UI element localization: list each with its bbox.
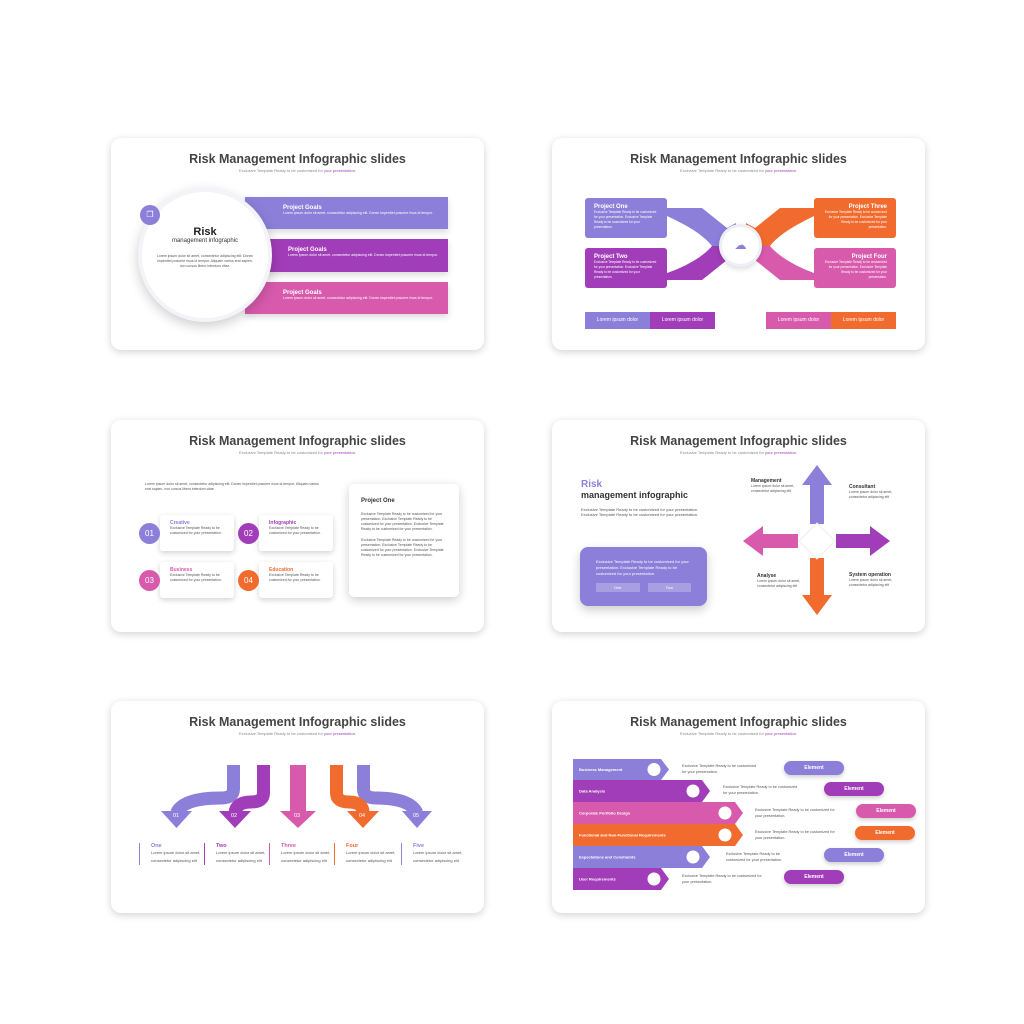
main circle: Risk	[193, 226, 217, 238]
main circle: management infographic	[172, 238, 238, 244]
subtitle: Exclusive Template Ready to be customized for your presentation.	[239, 168, 356, 173]
arrow rows	[573, 759, 835, 890]
card Education: 04	[244, 576, 253, 585]
arrow rows: for your presentation.	[682, 770, 718, 774]
bottom bars right: Lorem ipsum dolor	[843, 317, 884, 323]
label Management	[751, 478, 794, 493]
label Consultant: consectetur adipiscing elit	[849, 495, 889, 499]
card Creative	[139, 514, 236, 556]
slide 3: four numbered cards	[111, 420, 484, 632]
step Four: Four	[346, 843, 358, 849]
title: Risk Management Infographic slides	[189, 715, 406, 729]
card Creative: Creative	[170, 520, 190, 526]
cross arrows	[743, 465, 890, 615]
label Analyse: consectetur adipiscing elit	[757, 584, 797, 588]
center cloud icon	[719, 224, 762, 267]
title: Risk Management Infographic slides	[189, 152, 406, 166]
main circle	[138, 188, 272, 322]
step One	[139, 843, 201, 865]
panel Project One: Project One	[361, 498, 395, 504]
slide 6: requirement arrows	[552, 701, 925, 913]
purple box: Two	[666, 585, 673, 590]
step One: One	[151, 843, 162, 849]
arrows: 01	[173, 813, 179, 819]
step Three	[269, 843, 331, 865]
card Education: Exclusive Template Ready to be customized for your presentation.	[269, 573, 321, 582]
arrows: 05	[413, 813, 419, 819]
connectors	[667, 208, 814, 280]
step Two: Two	[216, 843, 227, 849]
element pills	[782, 761, 918, 888]
label System operation: Lorem ipsum dolor sit amet,	[849, 578, 892, 582]
card Business: Business	[170, 567, 192, 573]
box Project Four: Exclusive Template Ready to be customized for your presentation. Exclusive Template Ready to be customized for your presentation.	[825, 260, 887, 279]
bar 2: Lorem ipsum dolor sit amet, consectetur adipiscing elit. Donec imperdiet posuere risus id tempor.	[288, 253, 438, 257]
subtitle: Exclusive Template Ready to be customized for your presentation.	[239, 731, 356, 736]
title: Risk Management Infographic slides	[630, 715, 847, 729]
label Management: Lorem ipsum dolor sit amet,	[751, 484, 794, 488]
bottom bars right: Lorem ipsum dolor	[778, 317, 819, 323]
element pills: Element	[804, 765, 824, 771]
panel Project One	[349, 484, 459, 597]
box Project Four: Project Four	[852, 254, 887, 260]
box Project One: Project One	[594, 204, 628, 210]
label System operation: consectetur adipiscing elit	[849, 583, 889, 587]
arrows: 02	[231, 813, 237, 819]
purple box: One	[614, 585, 622, 590]
box Project Two	[585, 248, 667, 288]
arrow rows: Data Analysis	[579, 788, 606, 794]
card Education: Education	[269, 567, 293, 573]
step Two	[204, 843, 266, 865]
subtitle: Exclusive Template Ready to be customized for your presentation.	[239, 450, 356, 455]
card Infographic: Exclusive Template Ready to be customized for your presentation.	[269, 526, 321, 535]
arrow rows: Corporate Portfolio Design	[579, 810, 631, 816]
arrow rows: Functional and Non-Functional Requirements	[579, 832, 666, 838]
box Project One	[585, 198, 667, 238]
bar 1	[245, 197, 448, 229]
arrow rows: Business Management	[579, 767, 623, 772]
bottom bars right	[766, 312, 896, 329]
element pills: Element	[844, 852, 864, 858]
slide 5: curved arrows steps	[111, 701, 484, 913]
title: Risk Management Infographic slides	[630, 152, 847, 166]
heading Risk: management infographic	[581, 490, 688, 500]
heading Risk: Exclusive Template Ready to be customized for your presentation. Exclusive Template Ready to be customized for your presentation.	[581, 507, 698, 517]
label Analyse	[757, 573, 800, 588]
card Creative: Exclusive Template Ready to be customized for your presentation.	[170, 526, 222, 535]
slide 1: circle with goals	[111, 138, 484, 350]
label Analyse: Lorem ipsum dolor sit amet,	[757, 579, 800, 583]
subtitle: Exclusive Template Ready to be customized for your presentation.	[680, 731, 797, 736]
element pills: Element	[875, 830, 895, 836]
arrow rows: Exclusive Template Ready to be	[726, 852, 780, 856]
title: Risk Management Infographic slides	[630, 434, 847, 448]
arrow rows: your presentation.	[682, 880, 712, 884]
card Business: 03	[145, 576, 154, 585]
element pills: Element	[844, 786, 864, 792]
arrows	[161, 765, 432, 828]
element pills: Element	[876, 808, 896, 814]
box Project Two: Exclusive Template Ready to be customized for your presentation. Exclusive Template Ready to be customized for your presentation.	[594, 260, 656, 279]
step Three: Three	[281, 843, 296, 849]
step Five: Five	[413, 843, 424, 849]
arrow rows: Exclusive Template Ready to be customized for	[682, 874, 762, 878]
card Infographic	[238, 514, 336, 556]
bar 1: Project Goals	[283, 205, 322, 211]
step Four: Lorem ipsum dolor sit amet, consectetur adipiscing elit	[346, 850, 395, 863]
slide 2: four projects	[552, 138, 925, 350]
center cloud icon: ☁	[734, 238, 746, 252]
panel Project One: Exclusive Template Ready to be customized for your presentation. Exclusive Template Ready to be customized for your presentation. Exclusive Template Ready to be customized for your presentation.	[361, 512, 444, 531]
box Project Three	[814, 198, 896, 238]
bar 2: Project Goals	[288, 247, 327, 253]
purple box: Exclusive Template Ready to be customized for your presentation. Exclusive Template Ready to be customized for your presentation.	[596, 559, 689, 576]
bottom bars left: Lorem ipsum dolor	[597, 317, 638, 323]
arrow rows: customized for your presentation.	[726, 858, 782, 862]
label Analyse: Analyse	[757, 573, 776, 579]
card Infographic: Infographic	[269, 520, 296, 526]
slide 4: four-direction arrows	[552, 420, 925, 632]
label Management: consectetur adipiscing elit	[751, 489, 791, 493]
label System operation	[849, 572, 892, 587]
subtitle: Exclusive Template Ready to be customized for your presentation.	[680, 168, 797, 173]
heading Risk	[581, 479, 698, 517]
label Consultant: Consultant	[849, 484, 875, 490]
step Five: Lorem ipsum dolor sit amet, consectetur adipiscing elit	[413, 850, 462, 863]
step Five	[401, 843, 463, 865]
card Business	[139, 562, 236, 602]
card Business: Exclusive Template Ready to be customized for your presentation.	[170, 573, 222, 582]
bar 1: Lorem ipsum dolor sit amet, consectetur adipiscing elit. Donec imperdiet posuere risus id tempor.	[283, 211, 433, 215]
bar 3: Project Goals	[283, 290, 322, 296]
step One: Lorem ipsum dolor sit amet, consectetur adipiscing elit	[151, 850, 200, 863]
box Project Two: Project Two	[594, 254, 628, 260]
arrow rows: Exclusive Template Ready to be customized for	[755, 808, 835, 812]
bottom bars left	[585, 312, 715, 329]
bottom bars left: Lorem ipsum dolor	[662, 317, 703, 323]
arrows: 04	[359, 813, 365, 819]
main circle: Lorem ipsum dolor sit amet, consectetur adipiscing elit. Donec imperdiet posuere risus id tempor. Aliquam varius erat sapien, non cursus libero interdum vitae.	[157, 254, 253, 268]
box Project Four	[814, 248, 896, 288]
arrow rows: your presentation.	[755, 814, 785, 818]
arrow rows: Expectations and Constraints	[579, 854, 636, 860]
purple box	[580, 547, 707, 606]
icon circle: ❐	[146, 210, 154, 219]
intro paragraph: Lorem ipsum dolor sit amet, consectetur adipiscing elit. Donec imperdiet posuere risus id tempor. Aliquam varius erat sapien, non cursus libero interdum vitae.	[145, 482, 319, 491]
box Project One: Exclusive Template Ready to be customized for your presentation. Exclusive Template Ready to be customized for your presentation.	[594, 210, 656, 229]
card Creative: 01	[145, 529, 154, 538]
card Education	[238, 562, 336, 602]
label Management: Management	[751, 478, 782, 484]
label Consultant: Lorem ipsum dolor sit amet,	[849, 490, 892, 494]
panel Project One: Exclusive Template Ready to be customized for your presentation. Exclusive Template Ready to be customized for your presentation. Exclusive Template Ready to be customized for your presentation.	[361, 538, 444, 557]
label Consultant	[849, 484, 892, 499]
box Project Three: Project Three	[849, 204, 887, 210]
bar 3	[245, 282, 448, 314]
step Three: Lorem ipsum dolor sit amet, consectetur adipiscing elit	[281, 850, 330, 863]
label System operation: System operation	[849, 572, 891, 578]
icon circle	[140, 205, 160, 225]
heading Risk: Risk	[581, 479, 602, 490]
step Four	[334, 843, 396, 865]
card Infographic: 02	[244, 529, 253, 538]
arrow rows: for your presentation.	[723, 791, 759, 795]
arrow rows: your presentation.	[755, 836, 785, 840]
title: Risk Management Infographic slides	[189, 434, 406, 448]
arrow rows: Exclusive Template Ready to be customized	[682, 764, 756, 768]
arrow rows: Exclusive Template Ready to be customized	[723, 785, 797, 789]
step Two: Lorem ipsum dolor sit amet, consectetur adipiscing elit	[216, 850, 265, 863]
arrow rows: Exclusive Template Ready to be customized for	[755, 830, 835, 834]
subtitle: Exclusive Template Ready to be customized for your presentation.	[680, 450, 797, 455]
arrows: 03	[294, 813, 300, 819]
element pills: Element	[804, 874, 824, 880]
box Project Three: Exclusive Template Ready to be customized for your presentation. Exclusive Template Ready to be customized for your presentation.	[825, 210, 887, 229]
bar 2	[245, 239, 448, 272]
bar 3: Lorem ipsum dolor sit amet, consectetur adipiscing elit. Donec imperdiet posuere risus id tempor.	[283, 296, 433, 300]
arrow rows: User Requirements	[579, 876, 616, 882]
